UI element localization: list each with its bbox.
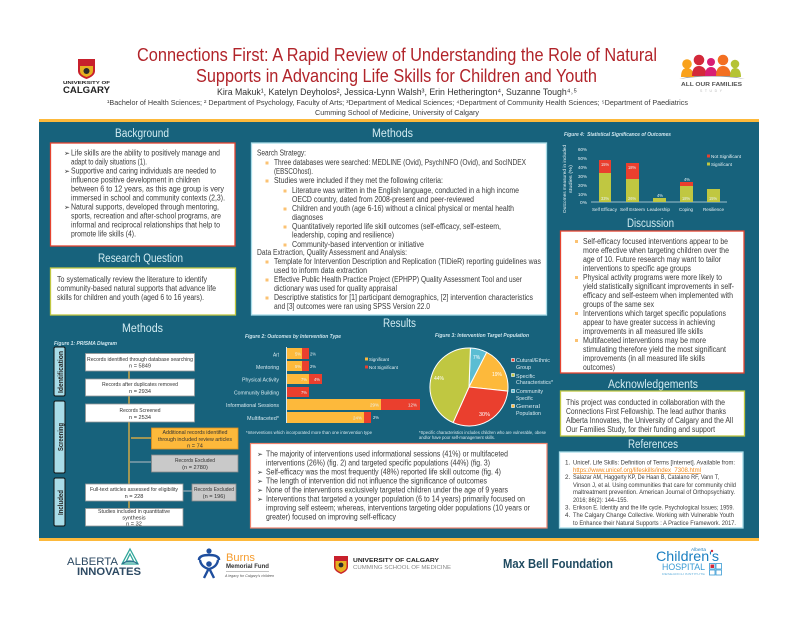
bar value labels: 4%: [314, 377, 320, 382]
panel: discussion: [560, 218, 744, 373]
bar value labels: 4%: [684, 177, 690, 182]
pie legend: Group: [516, 365, 531, 371]
bars: [591, 160, 727, 202]
methods text: Descriptive statistics for [1] participant demographics, [2] intervention characteristics: [274, 293, 533, 302]
acknowledgements text: [566, 398, 733, 434]
y axis title: Outcomes measured in included: [562, 145, 567, 213]
references text: The Calgary Change Collective. Working with Vulnerable Youth: [573, 512, 734, 519]
figure 3 footnote: *Specific characteristics includes children who are vulnerable, obese: [419, 430, 547, 435]
logo: Burns Memorial Fund: Burns: [226, 552, 255, 564]
pie labels: 44%: [434, 376, 445, 382]
legend: Not Significant: [711, 154, 742, 159]
bar value labels: 29%: [370, 402, 379, 408]
authors: Kira Makuk¹, Katelyn Deyholos², Jessica-Lynn Walsh³, Erin Hetherington⁴, Suzanne Tough⁴˒⁵: [217, 87, 577, 98]
x axis labels: Resilience: [703, 207, 724, 212]
bar value labels: 18%: [682, 196, 690, 201]
logo: All Our Families Study: STUDY: [700, 89, 723, 93]
affiliations: [107, 98, 688, 117]
methods text: OECD country, dated from 2008-present and peer-reviewed: [292, 195, 474, 204]
pie legend: Specific: [516, 396, 533, 402]
methods text: [257, 149, 541, 311]
flow boxes: Records identified through database searching: [87, 357, 193, 363]
results text: [257, 450, 530, 522]
heading: research question: Research Question: [98, 253, 183, 265]
bars: [286, 347, 420, 423]
discussion text: Interventions which target specific populations: [583, 309, 726, 318]
results text: interventions (26%) (fig. 2) and targeted specific populations (44%) (fig. 3): [266, 459, 490, 468]
flow boxes: Records after duplicates removed: [102, 382, 178, 388]
discussion text: [575, 237, 734, 372]
discussion text: groups of the same sex: [583, 300, 654, 309]
figure 1 caption: Figure 1: PRISMA Diagram: [54, 341, 118, 347]
discussion text: Physical activity programs were more likely to: [583, 273, 723, 282]
results text: improving self esteem; whereas, interventions targeting older populations (10 years or: [266, 504, 530, 513]
acknowledgements text: This project was conducted in collaboration with the: [566, 398, 725, 407]
logo: Alberta Children's Hospital: Children's: [656, 548, 719, 564]
panel: methods text: [252, 128, 546, 315]
category labels: [226, 352, 280, 422]
research question box: [50, 268, 236, 315]
background text: ➢: [64, 168, 70, 176]
flow boxes: Studies included in quantitative: [98, 509, 170, 515]
methods text: Search Strategy:: [257, 149, 306, 158]
logo: Burns Memorial Fund: [199, 548, 274, 578]
results text: Self-efficacy was the most frequently (48%) reported life skill outcome (fig. 4): [266, 468, 501, 477]
methods text: dictionary was used for quality appraisal: [274, 284, 397, 293]
research question text: [57, 275, 216, 302]
methods text: Studies were included if they met the following criteria:: [274, 176, 443, 185]
panel: PRISMA diagram: [54, 323, 238, 528]
methods text: diagnoses: [292, 213, 323, 222]
references text: 2.: [565, 474, 571, 481]
logo: University of Calgary Cumming School of Medicine: UNIVERSITY OF CALGARY: [353, 558, 439, 564]
methods text: Literature was written in the English language, conducted in a high income: [292, 186, 519, 195]
y axis labels: [578, 147, 587, 205]
background text: ➢: [64, 204, 70, 212]
results text: ➢: [257, 451, 263, 459]
bar value labels: [601, 162, 717, 201]
results text: greater) focused on improving self-efficacy: [266, 513, 396, 522]
methods text: used to inform data extraction: [274, 266, 367, 275]
logo: University of Calgary Cumming School of Medicine: CUMMING SCHOOL OF MEDICINE: [353, 565, 451, 571]
pie labels: 7%: [473, 355, 481, 361]
flow boxes: Records Screened: [120, 408, 160, 414]
references text: Salazar AM, Haggerty KP, De Haan B, Catalano RF, Vann T,: [573, 474, 719, 481]
y axis labels: 60%: [578, 147, 587, 152]
flow boxes: n = 32: [126, 522, 142, 528]
discussion text: interventions to specific age groups: [583, 264, 691, 273]
methods text: Community-based intervention or initiative: [292, 240, 424, 249]
results text: Interventions that targeted a younger population (6 to 14 years) primarily focused on: [266, 495, 525, 504]
figure 4 caption: Figure 4: Statistical Significance of Outcomes: [564, 132, 671, 138]
y axis labels: 40%: [578, 165, 587, 170]
figure 2 footnote: *Interventions which incorporated more than one intervention type: [246, 430, 373, 435]
discussion text: stimulating therefore yield the most significant: [583, 345, 727, 354]
results text: ➢: [257, 469, 263, 477]
discussion text: appear to have greater success in achieving: [583, 318, 715, 327]
acknowledgements text: Our Families Study, for their funding and support: [566, 425, 716, 434]
heading: methods (lower): Methods: [122, 323, 163, 335]
y axis labels: 20%: [578, 183, 587, 188]
references text: 1.: [565, 460, 571, 467]
logo: Alberta Children's Hospital: [656, 547, 722, 576]
poster body background: [39, 119, 759, 541]
bar value labels: 15%: [709, 196, 717, 201]
methods text: Three databases were searched: MEDLINE (Ovid), PsychINFO (Ovid), and SocINDEX: [274, 158, 527, 167]
methods text: and [3] outcomes were ran using SPSS Version 22.0: [274, 302, 431, 311]
category labels: Art: [273, 352, 279, 358]
flow boxes: Records Excluded: [194, 487, 234, 493]
background text: ➢: [64, 150, 70, 158]
discussion text: Multifaceted interventions may be more: [583, 336, 706, 345]
x axis labels: Self Esteem: [620, 207, 645, 212]
methods text: leadership, coping and resilience): [292, 230, 394, 240]
discussion box: [560, 231, 744, 373]
category labels: Mentoring: [256, 365, 279, 371]
logo: All Our Families Study: [679, 55, 745, 93]
bar value labels: 4%: [657, 193, 663, 198]
references text: 4.: [565, 512, 571, 519]
title: [137, 45, 657, 86]
flow boxes: Records Excluded: [175, 458, 215, 464]
pie legend: General: [516, 404, 540, 410]
bar value labels: 24%: [353, 416, 362, 420]
panel: background: [50, 128, 235, 246]
flow boxes: [86, 354, 238, 528]
flow boxes: Full-text articles assessed for eligibility: [90, 487, 178, 493]
x axis labels: Self Efficacy: [592, 207, 618, 212]
background text: adapt to daily situations (1).: [71, 158, 147, 167]
background text: between 6 to 12 years, as this age group is very: [71, 185, 224, 194]
panel: references: [560, 439, 743, 528]
logo: Alberta Innovates: INNOVATES: [77, 566, 141, 578]
y axis labels: 0%: [580, 200, 587, 205]
title: Connections First: A Rapid Review of Understanding the Role of Natural: [137, 45, 657, 65]
research question text: community-based natural supports that advance life: [57, 284, 216, 293]
bar value labels: 5%: [295, 364, 301, 369]
category labels: Physical Activity: [242, 378, 279, 384]
bar value labels: 18%: [628, 165, 636, 170]
bar value labels: 33%: [601, 196, 609, 201]
methods box: [252, 143, 546, 315]
references text: maltreatment prevention. American Journal of Orthopsychiatry.: [573, 489, 735, 496]
side labels: Included: [58, 490, 65, 515]
discussion text: improvements in all measured life skills: [583, 327, 703, 336]
heading: acknowledgements: Acknowledgements: [608, 379, 698, 391]
figure 4: statistical significance bar chart: [562, 132, 742, 213]
figure 3 footnote: and/or have poor self-management skills.: [419, 435, 495, 440]
methods text: Effective Public Health Practice Project (EPHPP) Quality Assessment Tool and user: [274, 275, 522, 284]
bar value labels: 12%: [408, 402, 417, 408]
logo: University of Calgary: [63, 59, 110, 95]
logo: University of Calgary: CALGARY: [63, 85, 110, 95]
results text: ➢: [257, 487, 263, 495]
references text: Unicef. Life Skills: Definition of Terms [Internet]. Available from:: [573, 460, 735, 467]
bar value labels: 2%: [310, 352, 316, 356]
discussion text: improvements (in all measured life skills: [583, 354, 705, 363]
legend: Significant: [369, 357, 390, 362]
background text: [64, 149, 225, 239]
flow boxes: n = 2934: [129, 389, 151, 395]
acknowledgements text: Connections First Fellowship. The lead author thanks: [566, 407, 726, 416]
bar value labels: 15%: [601, 162, 609, 167]
background text: sports, recreation and after-school programs, are: [71, 212, 221, 221]
research question text: To systematically review the literature to identify: [57, 275, 207, 284]
pie legend: Cutural/Ethnic: [516, 358, 550, 364]
discussion text: outcomes): [583, 363, 615, 372]
flow boxes: n = 5849: [129, 364, 151, 370]
results box: [250, 444, 547, 528]
title: Supports in Advancing Life Skills for Children and Youth: [196, 66, 597, 86]
pie legend: [512, 358, 554, 417]
logo: All Our Families Study: ALL OUR FAMILIES: [681, 82, 742, 88]
logo: Alberta Innovates: ALBERTA: [67, 556, 119, 568]
references text: [565, 460, 736, 527]
pie legend: Population: [516, 411, 541, 417]
flow boxes: (n = 196): [203, 494, 225, 500]
results text: ➢: [257, 496, 263, 504]
flow boxes: n = 2534: [129, 415, 151, 421]
figure 3: intervention target population pie chart: [419, 333, 554, 440]
background text: influence positive development in children: [71, 176, 200, 185]
discussion text: yield statistically significant improvements in self-: [583, 282, 734, 291]
references box: [560, 452, 743, 528]
panel: acknowledgements: [560, 379, 744, 436]
flow boxes: n = 228: [125, 494, 143, 500]
heading: methods: Methods: [372, 128, 413, 140]
background text: Natural supports, developed through mentoring,: [71, 203, 219, 212]
references text: Vinson J, et al. Using communities that care for community child: [573, 482, 736, 489]
bar value labels: 2%: [373, 415, 379, 420]
legend: Not Significant: [369, 365, 399, 370]
heading: results: Results: [383, 318, 416, 330]
y axis labels: 10%: [578, 192, 587, 197]
heading: discussion: Discussion: [627, 218, 674, 230]
panel: research question: [50, 253, 236, 315]
logo: Alberta Children's Hospital: RESEARCH INSTITUTE: [662, 572, 705, 576]
legend: [707, 154, 742, 167]
background text: Supportive and caring individuals are needed to: [71, 167, 217, 176]
bar value labels: 26%: [628, 196, 636, 201]
pie labels: 30%: [479, 412, 491, 418]
discussion text: age of 10. Future research may want to tailor: [583, 255, 721, 264]
x axis labels: Leadership: [647, 207, 670, 212]
background text: Life skills are the ability to positively manage and: [71, 149, 220, 158]
pie: [430, 348, 508, 426]
category labels: Community Building: [234, 390, 279, 396]
results text: The length of intervention did not influence the significance of outcomes: [266, 477, 487, 486]
side labels: Identification: [58, 351, 65, 393]
affiliations: ¹Bachelor of Health Sciences; ² Department of Psychology, Faculty of Arts; ³Department of Medical Sciences; ⁴Department of Community Health Sciences; ⁵Department of Paediatrics: [107, 98, 688, 107]
figure 3 footnote: [419, 430, 547, 440]
logo: University of Calgary: UNIVERSITY OF: [63, 80, 110, 85]
references text: Erikson E. Identity and the life cycle. Psychological Issues; 1959.: [573, 505, 734, 512]
research question text: skills for children and youth (aged 6 to 16 years).: [57, 293, 204, 302]
category labels: Informational Sessions: [226, 403, 279, 409]
logo: Burns Memorial Fund: A legacy for Calgary's children: [224, 574, 274, 578]
results text: None of the interventions exclusively targeted children under the age of 9 years: [266, 486, 508, 495]
y axis labels: 50%: [578, 156, 587, 161]
pie legend: Specific: [516, 374, 535, 380]
references text: 3.: [565, 505, 571, 512]
legend: Significant: [711, 162, 733, 167]
results text: The majority of interventions used informational sessions (41%) or multifaceted: [266, 450, 508, 459]
logo: Alberta Children's Hospital: HOSPITAL: [662, 562, 705, 572]
logo: University of Calgary Cumming School of Medicine: [334, 556, 451, 574]
figure 3 caption: Figure 3: Intervention Target Population: [435, 333, 529, 339]
background text: immersed in school and community contexts (2,3).: [71, 194, 225, 203]
flow boxes: synthesis: [122, 516, 146, 522]
footer logos: [67, 547, 722, 578]
flow boxes: (n = 2780): [182, 465, 208, 471]
side labels: [54, 347, 65, 526]
methods text: Template for Intervention Description and Replication (TIDieR) reporting guidelines was: [274, 257, 541, 266]
figure 2: outcomes by intervention type: [226, 334, 420, 435]
methods text: Quantitatively reported life skill outcomes (self-efficacy, self-esteem,: [292, 222, 501, 231]
results text: ➢: [257, 478, 263, 486]
bar value labels: 5%: [295, 352, 301, 356]
header: [63, 45, 745, 117]
bar value labels: 7%: [301, 390, 307, 395]
side labels: Screening: [58, 423, 65, 451]
category labels: Multifaceted*: [247, 416, 280, 422]
background text: promote life skills (4).: [71, 230, 136, 239]
panel: results summary: [250, 444, 547, 528]
flow boxes: through included review articles: [158, 437, 232, 443]
acknowledgements text: Alberta Innovates, the University of Calgary and the All: [566, 416, 733, 425]
y axis title: [562, 145, 573, 213]
heading: background: Background: [115, 128, 169, 140]
background text: informal and reciprocal relationships that help to: [71, 221, 221, 230]
bar value labels: [295, 352, 417, 420]
legend: [365, 357, 399, 370]
references text: 2016; 86(2): 144–155.: [573, 497, 628, 504]
pie labels: 19%: [492, 372, 503, 378]
x axis labels: [592, 207, 724, 212]
y axis labels: 30%: [578, 174, 587, 179]
heading: references: References: [628, 439, 678, 451]
logo: Burns Memorial Fund: Memorial Fund: [226, 564, 269, 570]
x axis labels: Coping: [679, 207, 693, 212]
methods text: Children and youth (age 6-16) without a clinical physical or mental health: [292, 204, 514, 213]
figure 2 caption: Figure 2: Outcomes by Intervention Type: [245, 334, 341, 340]
references text: to Enhance their Natural Supports : A Practice Framework. 2017.: [573, 520, 736, 527]
discussion text: Self-efficacy focused interventions appear to be: [583, 237, 728, 246]
pie legend: Community: [516, 389, 543, 395]
bar value labels: 2%: [310, 364, 316, 369]
logo: Alberta Children's Hospital: Alberta: [691, 547, 707, 552]
acknowledgements box: [560, 391, 744, 436]
discussion text: efficacy and self-esteem when implemented with: [583, 291, 733, 300]
methods text: (EBSCOhost).: [274, 167, 313, 176]
background box: [50, 143, 235, 246]
logo: Max Bell Foundation: Max Bell Foundation: [503, 557, 613, 571]
connector lines: [128, 371, 192, 508]
flow boxes: n = 74: [187, 444, 203, 450]
pie legend: Characteristics*: [516, 380, 554, 386]
bar value labels: 7%: [301, 377, 307, 382]
y axis title: studies (%): [568, 164, 573, 193]
methods text: Data Extraction, Quality Assessment and Analysis:: [257, 248, 407, 257]
discussion text: more effective when targeting children over the: [583, 246, 729, 255]
references text: https://www.unicef.org/lifeskills/index_7308.html: [573, 467, 701, 474]
affiliations: Cumming School of Medicine, University of Calgary: [315, 108, 479, 117]
flow boxes: Additional records identified: [162, 430, 228, 436]
logo: Alberta Innovates: [67, 549, 141, 578]
pie labels: [434, 355, 503, 418]
